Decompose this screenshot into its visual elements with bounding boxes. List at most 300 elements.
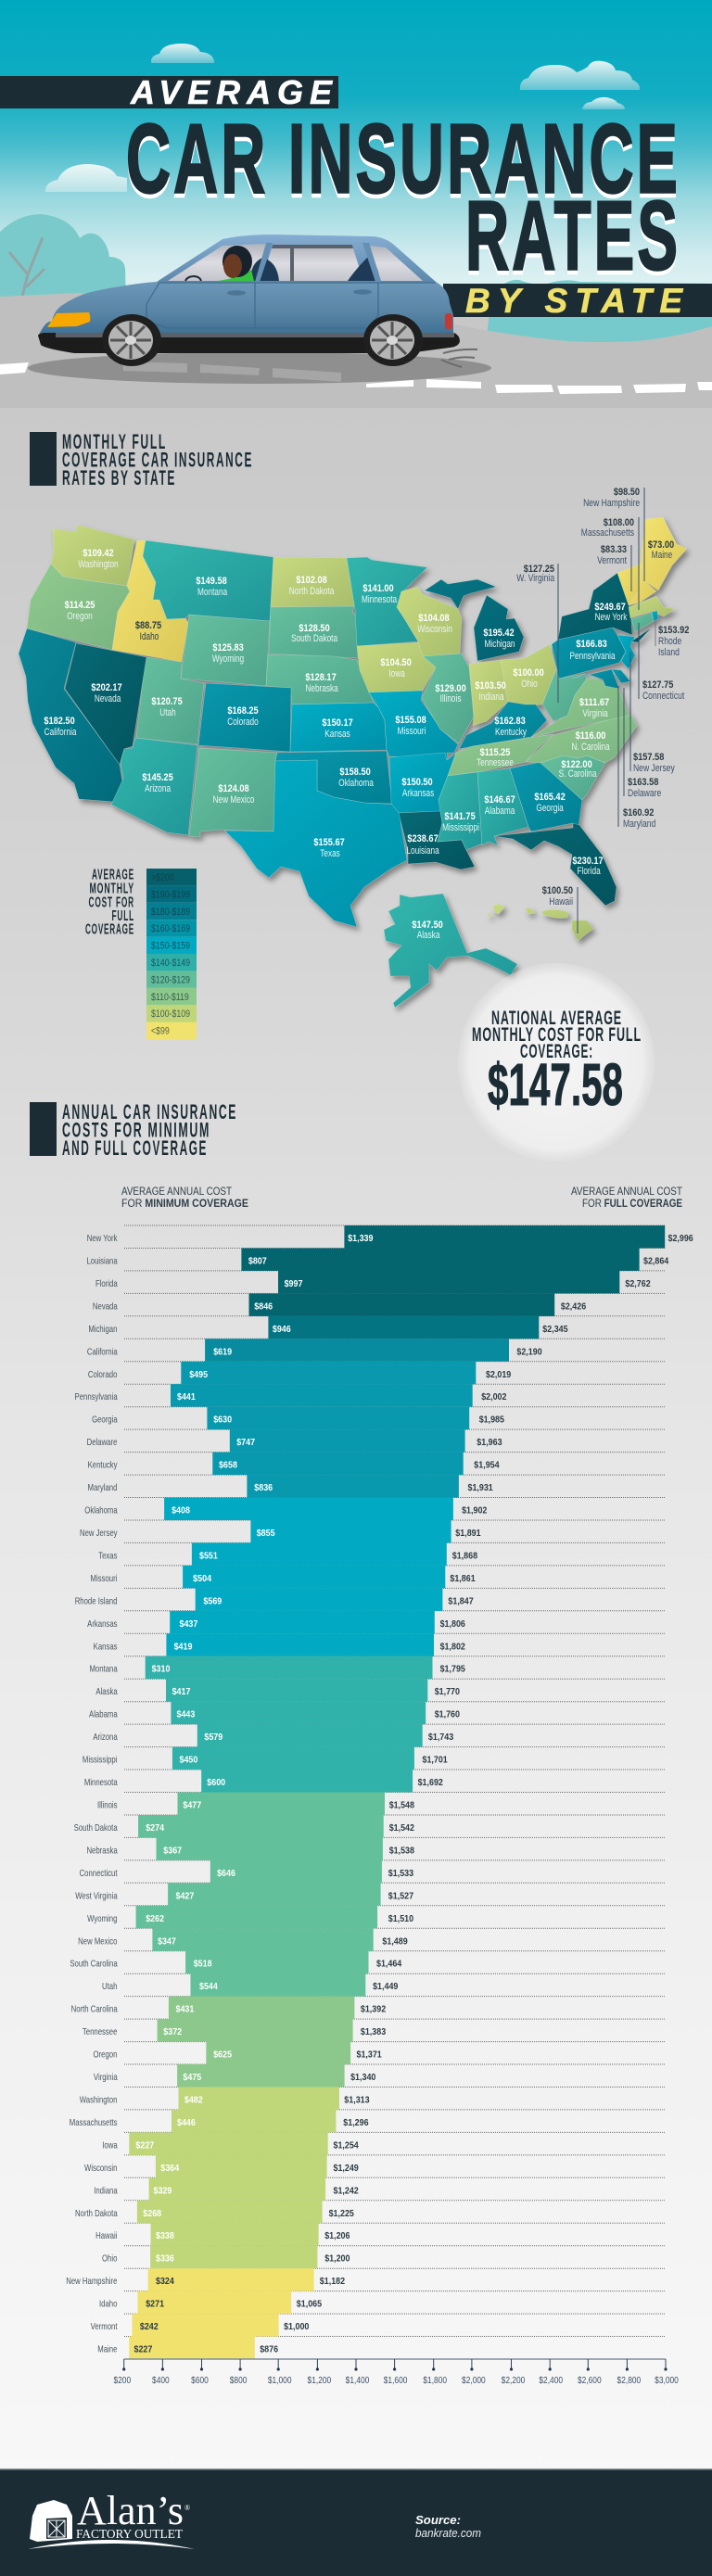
row: Massachusetts: $446	[177, 2117, 196, 2128]
chart axis: $1,600	[384, 2375, 407, 2386]
exhaust puffs	[441, 349, 477, 367]
row: Utah: $1,449	[373, 1982, 399, 1992]
chart axis: $2,600	[578, 2375, 602, 2386]
label: Mississippi: Mississippi	[442, 822, 479, 833]
callout: national average: NATIONAL AVERAGE	[491, 1007, 622, 1029]
state: Arizona	[111, 738, 197, 835]
row: Iowa	[102, 2132, 359, 2155]
state: Mississippi	[438, 772, 482, 850]
icon: barn	[30, 2500, 72, 2542]
row: Texas: $551	[199, 1551, 218, 1562]
legend scale: >$200	[151, 872, 174, 883]
row: New Jersey	[80, 1520, 481, 1542]
label: North Carolina: $116.00	[576, 730, 606, 742]
callout: national average: COVERAGE:	[520, 1040, 593, 1062]
state: Florida	[494, 823, 617, 906]
chart axis: $200	[113, 2375, 131, 2386]
label: Hawaii: $100.50	[542, 885, 573, 896]
label: California	[44, 716, 77, 738]
row: Rhode Island: $1,847	[448, 1596, 474, 1607]
label: Texas: Texas	[320, 848, 340, 859]
row: Alabama	[89, 1702, 461, 1724]
label: Maine: $73.00	[648, 539, 674, 551]
label: Minnesota	[362, 583, 398, 605]
leader lines	[558, 488, 655, 933]
car seats	[250, 258, 379, 281]
row: Alabama: $443	[177, 1709, 196, 1720]
label: Florida: Florida	[577, 866, 601, 877]
label: Arkansas: $150.50	[401, 777, 433, 788]
label: Kansas: $150.17	[322, 717, 353, 729]
state: Kentucky	[459, 702, 547, 749]
row: Kentucky: Kentucky	[88, 1460, 118, 1470]
road dashes in shadow	[122, 362, 341, 382]
label: Oklahoma	[338, 767, 374, 789]
row: Kansas: $1,802	[440, 1642, 465, 1653]
label: Nevada	[91, 682, 122, 704]
column head: minimum coverage: FOR MINIMUM COVERAGE	[121, 1197, 248, 1210]
row: Oklahoma: Oklahoma	[84, 1504, 118, 1516]
car shadow	[28, 352, 491, 384]
chart axis: $1,400	[346, 2375, 369, 2386]
label: Michigan: Michigan	[484, 639, 515, 650]
ground	[0, 293, 712, 408]
row: New Mexico: New Mexico	[78, 1935, 117, 1947]
row: Vermont: $242	[140, 2321, 159, 2332]
row: Mississippi: $450	[179, 1755, 198, 1766]
row: Tennessee: Tennessee	[83, 2026, 117, 2037]
state: Maryland	[572, 669, 619, 689]
label: Hawaii: Hawaii	[549, 896, 573, 907]
label: Georgia: Georgia	[536, 803, 564, 814]
state: Vermont	[617, 564, 641, 605]
row: Tennessee	[83, 2019, 387, 2042]
label: New Jersey	[633, 752, 675, 774]
row: Minnesota: $600	[207, 1777, 226, 1788]
source: Source:	[415, 2513, 461, 2527]
label: Connecticut	[642, 679, 685, 702]
row: Pennsylvania	[75, 1384, 507, 1407]
tail light	[445, 313, 452, 329]
label: Washington: Washington	[78, 559, 119, 570]
row: New Hampshire: $1,182	[320, 2277, 346, 2287]
row: Nebraska: Nebraska	[86, 1845, 118, 1856]
label: Hawaii	[542, 885, 573, 907]
chart axis: $2,000	[462, 2375, 486, 2386]
row: Indiana: $1,242	[333, 2186, 359, 2197]
column head: full coverage: FOR FULL COVERAGE	[582, 1197, 682, 1210]
state: Iowa	[357, 642, 436, 692]
label: New York: $249.67	[594, 602, 626, 613]
row: New Mexico: $347	[158, 1936, 176, 1948]
label: Maryland: Maryland	[623, 818, 655, 830]
row: Oregon	[94, 2042, 382, 2064]
row: Wyoming: $262	[146, 1913, 165, 1924]
label: Iowa	[380, 657, 412, 679]
row: South Carolina: $518	[194, 1959, 212, 1970]
row: Louisiana	[86, 1248, 669, 1271]
label: Minnesota: Minnesota	[362, 594, 398, 605]
heading: annual costs: COSTS FOR MINIMUM	[62, 1118, 210, 1142]
label: Pennsylvania: $166.83	[576, 639, 607, 650]
row: Indiana: $329	[154, 2186, 172, 2197]
cloud: top centre	[151, 44, 214, 63]
state: Nebraska	[266, 654, 374, 704]
state: Wisconsin	[397, 587, 462, 656]
row: New Hampshire: New Hampshire	[66, 2276, 117, 2286]
row: Idaho: Idaho	[99, 2299, 117, 2309]
row: Illinois: $1,548	[389, 1800, 415, 1811]
row: Wisconsin: $1,249	[333, 2163, 359, 2174]
car windows	[168, 244, 423, 281]
row: Arizona: $579	[204, 1732, 223, 1743]
headlight	[47, 312, 90, 327]
row: Hawaii: $338	[156, 2231, 174, 2241]
state: Alabama	[477, 768, 528, 845]
label: Wyoming: Wyoming	[212, 654, 244, 665]
row: Arizona: Arizona	[93, 1732, 118, 1742]
label: New Hampshire: $98.50	[614, 487, 640, 498]
row: Virginia: $475	[183, 2072, 202, 2083]
legend title: COST FOR	[89, 895, 134, 910]
heading: annual costs	[30, 1100, 237, 1160]
label: Montana: $149.58	[196, 576, 227, 587]
label: South Carolina: S. Carolina	[559, 768, 597, 780]
label: Nebraska: $128.17	[305, 672, 337, 683]
row: New Jersey: New Jersey	[80, 1528, 118, 1538]
legend title: COVERAGE	[85, 921, 134, 938]
label: South Dakota: $128.50	[299, 623, 330, 634]
label: Vermont: Vermont	[597, 555, 627, 566]
label: Tennessee: Tennessee	[477, 757, 514, 768]
chart axis: $2,200	[502, 2375, 525, 2386]
row: Nebraska: $367	[163, 1846, 182, 1857]
row: Texas: Texas	[98, 1550, 118, 1561]
legend scale: $180-$189	[151, 907, 190, 918]
source: bankrate.com	[415, 2526, 481, 2540]
sill and bumper	[38, 333, 460, 353]
row: Nevada	[93, 1293, 587, 1316]
row: Utah	[102, 1973, 399, 1997]
car body	[39, 282, 453, 335]
row: Mississippi	[83, 1747, 448, 1770]
row: Indiana	[94, 2177, 359, 2201]
state: New Jersey	[617, 635, 635, 669]
legend title: AVERAGE	[92, 868, 134, 882]
label: Illinois: $129.00	[435, 683, 466, 694]
row: Michigan: Michigan	[88, 1324, 117, 1334]
legend scale: <$99	[151, 1026, 170, 1037]
rear wheel	[363, 314, 423, 366]
label: Rhode Island: Island	[658, 647, 680, 658]
row: Colorado	[88, 1362, 512, 1384]
row: Washington: $1,313	[344, 2095, 370, 2106]
row: Georgia: Georgia	[92, 1415, 118, 1425]
row: Missouri	[91, 1566, 476, 1588]
row: Arizona: $1,743	[428, 1732, 454, 1743]
legend	[85, 868, 197, 1039]
label: Washington: $109.42	[83, 548, 114, 559]
state: Colorado	[198, 683, 291, 752]
row: Delaware: $747	[236, 1437, 255, 1448]
cloud: small right	[582, 97, 625, 109]
sky	[0, 0, 712, 306]
state: North Dakota	[271, 557, 355, 607]
row: Texas	[98, 1542, 478, 1566]
logo: FACTORY OUTLET	[76, 2528, 183, 2542]
label: Wisconsin: Wisconsin	[417, 624, 452, 635]
label: North Carolina: N. Carolina	[571, 742, 610, 753]
state: Maine	[641, 517, 687, 590]
label: Colorado: Colorado	[227, 717, 259, 728]
row: South Dakota	[74, 1815, 415, 1837]
row: Oklahoma: $408	[172, 1505, 190, 1516]
chart axis: $800	[230, 2375, 247, 2386]
row: New Jersey: $1,891	[455, 1528, 481, 1539]
label: California: $182.50	[44, 716, 75, 727]
row: Kentucky: $1,954	[474, 1460, 500, 1471]
chart axis: $1,000	[268, 2375, 292, 2386]
label: Tennessee: $115.25	[480, 747, 511, 758]
heading: monthly rates	[30, 430, 253, 489]
state: Connecticut	[631, 613, 654, 632]
road dashes	[0, 362, 712, 394]
label: Georgia: $165.42	[534, 792, 566, 803]
label: Wyoming: $125.83	[212, 642, 244, 654]
label: Oregon: $114.25	[65, 600, 95, 611]
row: North Dakota: North Dakota	[75, 2208, 118, 2218]
heading: monthly rates: COVERAGE CAR INSURANCE	[62, 449, 253, 471]
row: Georgia: $630	[213, 1415, 233, 1426]
row: Montana: $310	[152, 1664, 171, 1675]
row: North Carolina	[71, 1997, 387, 2019]
label: New York: New York	[595, 612, 628, 623]
label: Colorado: $168.25	[227, 705, 259, 717]
label: Delaware	[628, 777, 662, 799]
row: Arkansas: $1,806	[440, 1618, 465, 1630]
label: Alaska	[412, 920, 443, 941]
label: Tennessee	[477, 747, 514, 768]
state: South Dakota	[269, 606, 358, 658]
row: Alabama: $1,760	[435, 1709, 461, 1720]
state: North Carolina	[526, 714, 637, 763]
label: Kansas	[322, 717, 353, 740]
state: Illinois	[422, 654, 474, 743]
state: Missouri	[369, 691, 458, 758]
label: Rhode Island	[658, 625, 690, 658]
row: Pennsylvania: $2,002	[481, 1392, 507, 1402]
source	[415, 2513, 481, 2540]
legend scale: $100-$109	[151, 1009, 190, 1021]
label: Kansas: Kansas	[324, 729, 350, 740]
label: New Mexico: New Mexico	[213, 794, 254, 806]
label: Alaska: Alaska	[417, 930, 440, 941]
row: Hawaii: $1,206	[324, 2231, 350, 2241]
row: Wyoming: $1,510	[388, 1913, 414, 1924]
state: Montana	[143, 540, 273, 621]
row: Alaska: Alaska	[95, 1686, 118, 1696]
row: North Carolina: North Carolina	[71, 2004, 118, 2014]
row: Colorado: Colorado	[88, 1369, 117, 1379]
row: Tennessee: $1,383	[361, 2026, 387, 2037]
label: Missouri: Missouri	[398, 726, 426, 737]
row: Utah: Utah	[102, 1981, 117, 1991]
row: Virginia: Virginia	[94, 2072, 118, 2082]
label: Ohio: $100.00	[513, 667, 544, 679]
label: Idaho: Idaho	[140, 631, 159, 642]
row: Maryland	[87, 1475, 493, 1498]
heading: monthly rates: RATES BY STATE	[62, 466, 176, 489]
row: New York: New York	[87, 1233, 118, 1243]
label: Idaho	[135, 620, 161, 642]
label: Oklahoma: Oklahoma	[338, 778, 374, 789]
row: New Jersey: $855	[257, 1528, 275, 1539]
row: Nevada: Nevada	[93, 1301, 118, 1312]
row: Kansas	[94, 1633, 465, 1656]
row: Connecticut: $646	[217, 1868, 235, 1879]
row: Illinois: Illinois	[97, 1799, 118, 1810]
label: New Jersey: $157.58	[633, 752, 665, 763]
row: South Dakota: $274	[146, 1822, 165, 1834]
state: Oklahoma	[275, 751, 392, 804]
row: Missouri: $504	[193, 1573, 212, 1584]
label: Ohio: Ohio	[521, 679, 538, 690]
row: Oregon: Oregon	[94, 2049, 117, 2060]
row: Illinois: $477	[183, 1800, 201, 1811]
row: Texas: $1,868	[452, 1551, 478, 1562]
row: South Dakota: $1,542	[389, 1822, 415, 1834]
legend scale: $140-$149	[151, 958, 190, 969]
front wheel	[102, 314, 161, 366]
label: Oregon: Oregon	[67, 611, 93, 622]
state: New Hampshire	[629, 564, 656, 605]
state: Georgia	[510, 762, 582, 831]
state: Utah	[136, 657, 204, 744]
state: Rhode Island	[652, 611, 658, 621]
label: Arizona: Arizona	[145, 783, 172, 794]
label: Rhode Island: $153.92	[658, 625, 690, 636]
label: Alabama	[484, 794, 515, 817]
label: Virginia: $111.67	[579, 697, 610, 708]
row: Georgia: $1,985	[479, 1415, 505, 1426]
label: Nebraska: Nebraska	[305, 683, 338, 694]
bush: right	[486, 280, 712, 343]
footer	[0, 2468, 712, 2576]
row: Vermont	[91, 2314, 310, 2337]
row: Oklahoma	[84, 1498, 488, 1520]
row: Maryland: Maryland	[87, 1482, 117, 1492]
state: West Virginia	[542, 669, 587, 721]
label: Utah	[151, 696, 183, 718]
row: North Carolina: $431	[176, 2004, 195, 2015]
state: Idaho	[112, 540, 188, 662]
label: New Hampshire	[583, 487, 641, 509]
legend title: FULL	[111, 908, 134, 924]
banner: average	[0, 73, 338, 111]
row: Washington: $482	[184, 2095, 203, 2106]
label: Louisiana: $238.67	[407, 833, 439, 844]
label: Montana	[196, 576, 228, 598]
row: Wyoming	[87, 1906, 414, 1928]
row: New Hampshire	[66, 2268, 346, 2291]
chart axis: $1,200	[308, 2375, 331, 2386]
label: Pennsylvania: Pennsylvania	[570, 651, 616, 662]
label: Vermont	[597, 544, 627, 566]
state: Massachusetts	[629, 596, 675, 618]
row: West Virginia: West Virginia	[75, 1890, 118, 1901]
label: Iowa: Iowa	[388, 668, 405, 679]
row: North Dakota: $268	[143, 2208, 162, 2219]
label: South Dakota	[291, 623, 338, 644]
row: Virginia: $1,340	[350, 2072, 376, 2083]
row: Maine: Maine	[97, 2343, 117, 2354]
legend scale	[146, 869, 197, 1039]
state: Kansas	[290, 703, 387, 752]
row: Louisiana: $807	[248, 1256, 267, 1267]
label: Missouri: $155.08	[395, 715, 426, 726]
row: Massachusetts: Massachusetts	[70, 2117, 118, 2127]
row: West Virginia: $427	[176, 1891, 194, 1902]
row: West Virginia: $1,527	[388, 1891, 413, 1902]
state: Pennsylvania	[552, 628, 626, 679]
bush: left	[0, 214, 126, 301]
legend scale: $190-$199	[151, 890, 190, 901]
row: Michigan: $946	[273, 1324, 291, 1335]
label: Nebraska	[305, 672, 338, 694]
label: Indiana: Indiana	[479, 692, 504, 703]
row: South Dakota: South Dakota	[74, 1822, 118, 1833]
label: Kentucky: $162.83	[494, 716, 526, 727]
label: Vermont: $83.33	[601, 544, 627, 555]
bar chart	[66, 1225, 693, 2359]
label: South Dakota: South Dakota	[291, 633, 338, 644]
label: Utah: Utah	[159, 707, 176, 718]
row: South Carolina	[70, 1951, 402, 1973]
label: Maryland	[623, 807, 655, 830]
row: Pennsylvania: Pennsylvania	[75, 1391, 118, 1402]
US map	[19, 517, 687, 1008]
row: Iowa: Iowa	[102, 2139, 118, 2151]
state: Wyoming	[181, 615, 270, 686]
legend scale: $160-$169	[151, 923, 190, 935]
row: Vermont: $1,000	[284, 2321, 310, 2332]
label: Connecticut: Connecticut	[642, 691, 685, 702]
chart axis: $2,400	[539, 2375, 563, 2386]
row: Connecticut	[80, 1860, 414, 1883]
label: Rhode Island: Rhode	[658, 636, 682, 647]
label: New York	[594, 602, 628, 623]
chart axis: $600	[191, 2375, 209, 2386]
label: Georgia	[534, 792, 566, 814]
label: Arizona	[142, 772, 173, 794]
row: Maine: $876	[260, 2344, 279, 2355]
label: Michigan	[483, 628, 515, 650]
label: Wyoming	[212, 642, 244, 665]
label: California: California	[44, 727, 77, 738]
label: Florida: $230.17	[572, 856, 604, 867]
row: Iowa: $1,254	[333, 2140, 359, 2151]
label: Arkansas: Arkansas	[402, 788, 434, 799]
car	[38, 235, 460, 366]
row: North Dakota: $1,225	[329, 2208, 354, 2219]
row: Tennessee: $372	[163, 2026, 183, 2037]
label: Maine: Maine	[652, 550, 672, 561]
legend scale: $120-$129	[151, 975, 190, 986]
label: Virginia: Virginia	[582, 708, 608, 719]
row: Oregon: $1,371	[356, 2049, 382, 2061]
state: Michigan	[425, 579, 524, 661]
row: Rhode Island: Rhode Island	[75, 1595, 117, 1606]
